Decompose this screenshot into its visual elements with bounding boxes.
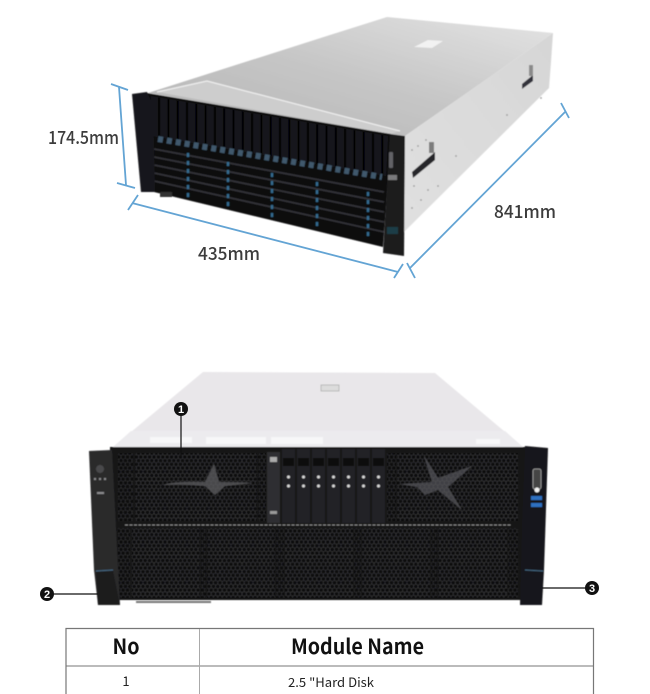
row module name: 2.5 "Hard Disk: [288, 672, 374, 691]
height line: [111, 84, 135, 188]
table header: Module Name: Module Name: [291, 631, 424, 661]
cover label: [321, 385, 339, 391]
lower drive rows: [154, 149, 384, 232]
drive carriers: [282, 449, 385, 523]
rear handle bracket: [529, 65, 533, 76]
lower drive LEDs: [188, 153, 368, 240]
left ear accent: [96, 570, 113, 571]
dimension lines: [111, 84, 569, 278]
width line: [128, 195, 403, 278]
callout 3: [542, 581, 599, 595]
ear labels: [388, 175, 397, 180]
front bays panel: [147, 93, 391, 247]
control module tag: [270, 511, 277, 514]
side vents: [118, 453, 518, 598]
depth line: [407, 103, 569, 278]
callout 2: 2: [44, 589, 50, 601]
VGA port: [533, 469, 541, 489]
right fan blades: [400, 456, 472, 510]
front cover strip: [113, 431, 523, 447]
drive latches: [158, 139, 382, 177]
upper left fan vent: [135, 453, 257, 521]
cover seam: [157, 81, 400, 131]
control module: [267, 452, 280, 523]
foot: [160, 192, 172, 197]
left ear foot: [96, 571, 120, 605]
left fan blades: [163, 464, 253, 495]
module table: [66, 628, 594, 694]
upper drive bays: [150, 96, 388, 176]
rear handle: [522, 75, 533, 89]
left ear controls: [94, 465, 106, 494]
callout 2: [40, 587, 98, 601]
seam: [125, 524, 512, 526]
lower fan vents: [132, 528, 507, 598]
left rack ear: [132, 92, 155, 192]
right ear accent: [525, 570, 543, 571]
side handle: [412, 152, 435, 178]
top cover: [113, 372, 523, 447]
server: front view: [89, 372, 548, 605]
left ear: [89, 450, 120, 605]
chassis body: [110, 447, 526, 600]
callout 3: 3: [589, 583, 595, 595]
table header: No: No: [112, 631, 140, 661]
side panel: [404, 33, 553, 232]
callout 1: [174, 402, 188, 457]
front cover strip: [157, 81, 400, 134]
top cover: [148, 17, 553, 136]
right rack ear: [383, 134, 405, 256]
top cover label: [414, 40, 443, 48]
ear accent: [387, 227, 398, 234]
label: width: 435mm: [198, 240, 260, 266]
server: isometric view: [132, 17, 553, 256]
ear connector: [389, 152, 393, 168]
cover stickers: [150, 437, 500, 444]
rail: [136, 601, 211, 603]
control module badge: [270, 457, 277, 462]
USB ports: [531, 496, 542, 507]
callout 1: 1: [178, 404, 184, 416]
right ear: [520, 446, 548, 605]
label: height: 174.5mm: [48, 124, 119, 150]
label: depth: 841mm: [494, 198, 556, 224]
handle bracket: [429, 142, 434, 153]
row number: 1: [122, 671, 130, 690]
side speckles: [411, 97, 542, 209]
power button: [534, 488, 540, 492]
upper right fan vent: [397, 453, 518, 521]
